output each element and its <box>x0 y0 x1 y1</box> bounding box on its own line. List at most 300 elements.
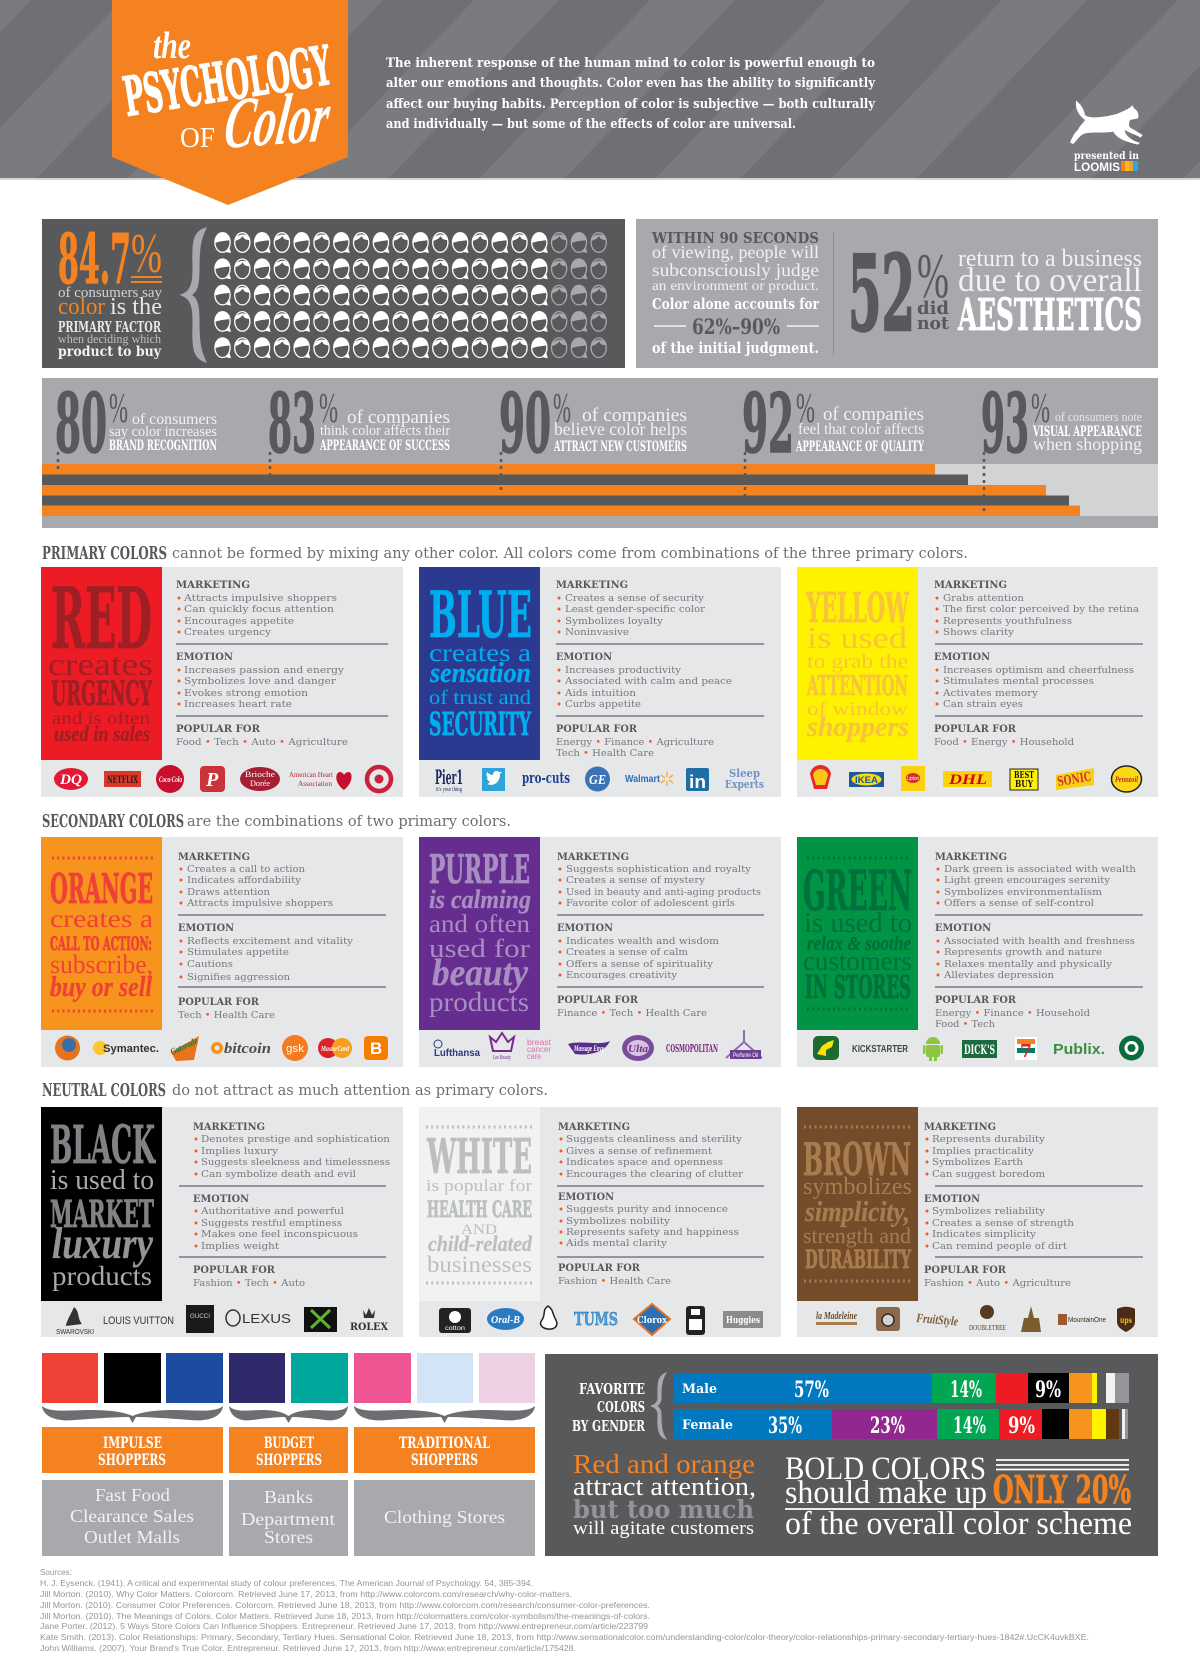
block text: orange: CALL TO ACTION: <box>50 933 152 955</box>
details: red: Creates urgency <box>184 627 272 638</box>
logo: Dick's <box>962 1040 997 1058</box>
block text: yellow: to grab the <box>807 651 908 673</box>
logo: Lufthansa: Lufthansa <box>434 1048 480 1059</box>
stat: 52% did not: did <box>917 298 949 319</box>
sources: Jill Morton. (2010). The Meanings of Colors. Color Matters. Retrieved June 18, 2013, from http://colormatters.com/color-symbolism/the-meanings-of-colors. <box>40 1612 650 1621</box>
logo: Android <box>923 1037 943 1061</box>
title banner: Color <box>220 76 335 164</box>
details: yellow: The first color perceived by the retina <box>943 604 1139 615</box>
details: white: Encourages the clearing of clutter <box>566 1169 743 1180</box>
logo: Brioche Doree: Brioche <box>245 770 276 779</box>
logo: Oral-B <box>487 1308 524 1330</box>
block text: red <box>48 569 153 746</box>
logo: Breast Cancer Care: breast <box>527 1038 552 1047</box>
chart: female bar <box>673 1409 1128 1439</box>
details: yellow: Increases optimism and cheerfulness <box>943 665 1134 676</box>
logo: Blogger: B <box>370 1039 382 1058</box>
shopper card: impulse: Clearance Sales <box>70 1506 194 1526</box>
logo: la Madeleine <box>816 1310 857 1325</box>
shopper card: budget <box>229 1427 348 1556</box>
details: brown: Fashion • Auto • Agriculture <box>924 1278 1071 1289</box>
logo: Walmart: Walmart <box>625 774 661 785</box>
details: black: Makes one feel inconspicuous <box>201 1229 358 1240</box>
details: yellow: Grabs attention <box>943 593 1024 604</box>
stat: 84.7%: % <box>131 223 162 285</box>
logo: Tums: TUMS <box>574 1309 618 1330</box>
logo: Huggies <box>723 1311 763 1328</box>
logos: green brands <box>813 1036 1144 1062</box>
logo: Perfume Oil: Perfume Oil <box>733 1053 758 1059</box>
logos: white brands <box>439 1304 763 1335</box>
text: within 90 seconds: Color alone accounts for <box>652 296 819 313</box>
details: red: EMOTION <box>176 651 233 663</box>
logo: DQ <box>54 768 88 790</box>
details: red: Food • Tech • Auto • Agriculture <box>176 737 348 748</box>
stat: 92% <box>742 377 925 472</box>
logo: Symantec: Symantec. <box>103 1043 159 1055</box>
block text: brown: simplicity, <box>804 1196 910 1228</box>
details: yellow: Can strain eyes <box>943 699 1023 710</box>
logo: Breast Cancer Care: care <box>527 1052 541 1061</box>
stat: 93% <box>981 377 1142 472</box>
shopper card: impulse <box>42 1427 223 1556</box>
logo: Gucci <box>186 1305 214 1333</box>
logo: Pier 1 <box>435 765 463 793</box>
block text: red: creates <box>48 646 153 682</box>
details: purple: Used in beauty and anti-aging products <box>566 887 761 898</box>
details: brown: Can suggest boredom <box>932 1169 1045 1180</box>
block text: purple: products <box>429 987 529 1017</box>
heading: primary colors: PRIMARY COLORS <box>42 543 167 564</box>
sources <box>40 1568 1089 1653</box>
intro paragraph: affect our buying habits. Perception of color is subjective — both culturally <box>386 97 875 112</box>
swatches: shopper palettes <box>42 1353 535 1403</box>
block text: blue: sensation <box>429 658 531 689</box>
chart: female bar: 9% <box>1008 1413 1035 1439</box>
details: green: MARKETING <box>935 851 1007 863</box>
logo: MountainOne: MountainOne <box>1068 1315 1106 1324</box>
moustache braces <box>42 1406 535 1423</box>
stat: 52% did not: % <box>917 240 949 311</box>
block text: yellow: is used <box>807 620 908 655</box>
title banner <box>112 0 348 205</box>
details: black <box>179 1121 390 1289</box>
details: purple: EMOTION <box>557 922 613 934</box>
intro paragraph: The inherent response of the human mind to color is powerful enough to <box>386 56 875 71</box>
details: green: Represents growth and nature <box>944 947 1102 958</box>
logo: Lexus <box>226 1310 291 1326</box>
chart: female bar: 23% <box>870 1413 905 1439</box>
stat: 80% <box>55 377 217 472</box>
brace <box>651 1373 666 1439</box>
logos: red brands <box>54 765 391 793</box>
text: bold colors: of the overall color scheme <box>785 1506 1132 1542</box>
details: green: Energy • Finance • Household <box>935 1008 1090 1019</box>
block text: purple: PURPLE <box>429 847 530 893</box>
heading: neutral colors: NEUTRAL COLORS <box>42 1080 166 1101</box>
text: bold colors: should make up <box>785 1475 987 1511</box>
logos: blue brands: Pier1 <box>435 765 463 789</box>
stat: 92%: APPEARANCE OF QUALITY <box>795 439 925 455</box>
block text: purple: is calming <box>429 885 531 914</box>
logo: Cotton: cotton <box>445 1326 465 1332</box>
details: black: MARKETING <box>193 1121 265 1133</box>
details: white: EMOTION <box>558 1191 614 1203</box>
title banner: PSYCHOLOGY <box>119 33 336 129</box>
logos: purple brands: COSMOPOLITAN <box>666 1042 718 1055</box>
logo: Pro-Cuts: pro-cuts <box>522 769 570 787</box>
details: green: Food • Tech <box>935 1019 995 1030</box>
details: brown: EMOTION <box>924 1193 980 1205</box>
text: consumers primary factor: PRIMARY FACTOR <box>58 318 161 336</box>
logo: DQ: DQ <box>59 772 82 788</box>
details: brown: Indicates simplicity <box>932 1229 1037 1240</box>
chart: male bar: 14% <box>950 1377 982 1403</box>
logo: Lee Beauty <box>490 1033 514 1061</box>
details: black: EMOTION <box>193 1193 249 1205</box>
block text: white: businesses <box>427 1252 532 1277</box>
details: black: Suggests sleekness and timelessness <box>201 1157 390 1168</box>
text: red and orange: but too much <box>573 1495 754 1524</box>
intro paragraph: alter our emotions and thoughts. Color even has the ability to significantly <box>386 76 875 91</box>
logo: Dick's: DICK'S <box>964 1043 995 1058</box>
logo: DoubleTree <box>969 1305 1006 1332</box>
details: purple: Encourages creativity <box>566 970 678 981</box>
block text: yellow <box>805 584 909 743</box>
details: green: Light green encourages serenity <box>944 875 1111 886</box>
logos: brown brands <box>816 1305 1135 1332</box>
logo: Gucci: GUCCI <box>190 1314 210 1320</box>
details: orange: MARKETING <box>178 851 250 863</box>
logo: Swarovski: SWAROVSKI <box>56 1329 94 1336</box>
logo: Xbox <box>304 1307 337 1332</box>
details: black: POPULAR FOR <box>193 1264 275 1276</box>
text: within 90 seconds: 62%–90% <box>692 314 780 339</box>
details: green: Offers a sense of self-control <box>944 898 1094 909</box>
text: red and orange: Red and orange <box>573 1449 755 1479</box>
logo: Pier 1: it's your thing <box>436 787 462 793</box>
icon: wolf and Loomis credit <box>1070 101 1143 174</box>
block text: yellow: YELLOW <box>805 584 909 632</box>
panel: red <box>41 567 403 797</box>
logo: GSK <box>282 1035 308 1061</box>
text: return due to aesthetics: due to overall <box>958 262 1142 299</box>
details: green: POPULAR FOR <box>935 994 1016 1006</box>
panel: black <box>41 1107 403 1337</box>
block text: green: customers <box>803 946 912 976</box>
details: black: Implies luxury <box>201 1146 279 1157</box>
text: within 90 seconds: of viewing, people will <box>652 242 819 262</box>
block text: orange: creates a <box>50 906 153 933</box>
stat: 92%: of companies <box>823 404 924 425</box>
stat: 83%: APPEARANCE OF SUCCESS <box>319 438 450 454</box>
block text: black: luxury <box>52 1219 153 1268</box>
text: red and orange: will agitate customers <box>573 1518 754 1539</box>
block text: orange: subscribe, <box>50 950 153 979</box>
details: purple: MARKETING <box>557 851 629 863</box>
block text: brown: strength and <box>803 1223 911 1248</box>
details: brown: Represents durability <box>932 1134 1046 1145</box>
details: white: Indicates space and openness <box>566 1157 723 1168</box>
details: red: Increases passion and energy <box>184 665 345 676</box>
details: red: Encourages appetite <box>184 616 294 627</box>
text: red and orange <box>573 1449 756 1539</box>
details: purple: Indicates wealth and wisdom <box>566 936 719 947</box>
sources: Jill Morton. (2010). Why Color Matters. Colorcom. Retrieved June 17, 2013, from http://www.colorcom.com/research/why-color-matters. <box>40 1590 572 1599</box>
logo: building <box>1021 1306 1041 1332</box>
logo: Publix: Publix. <box>1053 1041 1105 1058</box>
details: blue: Tech • Health Care <box>556 748 654 759</box>
details: blue: Symbolizes loyalty <box>565 616 664 627</box>
block text: yellow: shoppers <box>806 712 909 743</box>
details: blue: Aids intuition <box>564 688 636 699</box>
details: orange: EMOTION <box>178 922 234 934</box>
text: consumers primary factor: product to buy <box>58 344 162 360</box>
shopper card: impulse: Fast Food <box>95 1485 170 1505</box>
block text: blue: of trust and <box>429 687 531 709</box>
block text: yellow: ATTENTION <box>806 671 908 702</box>
shopper card: budget: SHOPPERS <box>256 1450 322 1469</box>
block text: black <box>50 1115 156 1291</box>
stat: 90%: believe color helps <box>554 419 687 439</box>
heading: secondary colors <box>42 811 511 832</box>
heading: secondary colors: are the combinations of two primary colors. <box>187 812 511 830</box>
logo: Breast Cancer Care <box>527 1038 552 1061</box>
details: black: Denotes prestige and sophistication <box>201 1134 390 1145</box>
stat: 92%: % <box>796 386 815 432</box>
details: white: Aids mental clarity <box>565 1238 668 1249</box>
shopper card: traditional: SHOPPERS <box>411 1450 478 1469</box>
logo: Lufthansa <box>434 1040 480 1059</box>
heading: primary colors: cannot be formed by mixing any other color. All colors come from combinations of the three primary colors. <box>172 544 968 562</box>
details: orange: Tech • Health Care <box>178 1010 275 1021</box>
heading: neutral colors <box>42 1080 548 1101</box>
shopper card: budget: Department <box>241 1509 335 1529</box>
logo: DHL <box>943 771 992 788</box>
shopper card: impulse: IMPULSE <box>103 1433 162 1452</box>
details: red <box>176 579 388 748</box>
logo: Brioche Doree <box>240 767 280 791</box>
details: orange <box>178 851 386 1021</box>
details: brown: Can remind people of dirt <box>932 1241 1067 1252</box>
text: bold colors <box>785 1451 1132 1542</box>
details: yellow: MARKETING <box>934 579 1007 591</box>
logo: Starbucks <box>1119 1036 1144 1060</box>
block text: blue: creates a <box>429 640 531 667</box>
stat: 83%: of companies <box>347 407 450 428</box>
block text: blue <box>429 578 532 743</box>
panel: yellow <box>797 567 1158 797</box>
block text: red: and is often <box>52 708 150 728</box>
logo: Coca-Cola: Coca-Cola <box>159 775 182 784</box>
stat: 80%: BRAND RECOGNITION <box>109 438 217 454</box>
block text: red: used in sales <box>54 721 150 746</box>
block text: green: is used to <box>804 908 912 939</box>
details: brown: Creates a sense of strength <box>932 1218 1074 1229</box>
text: consumers primary factor <box>58 285 162 360</box>
details: black: Can symbolize death and evil <box>201 1169 356 1180</box>
heading: favorite colors by gender: BY GENDER <box>572 1417 645 1435</box>
logo: la Madeleine: la Madeleine <box>816 1310 857 1322</box>
logo: UPS <box>1117 1307 1135 1332</box>
stat: 84.7% <box>58 220 162 300</box>
heading: neutral colors: do not attract as much attention as primary colors. <box>172 1081 548 1099</box>
block text: purple: and often <box>429 911 531 938</box>
logo: Huggies: Huggies <box>726 1316 760 1326</box>
stat: 93%: % <box>1031 386 1050 432</box>
details: green: Relaxes mentally and physically <box>944 959 1113 970</box>
block text: orange: ORANGE <box>50 865 153 913</box>
stat: 52% did not: 52 <box>848 232 915 355</box>
details: orange: Attracts impulsive shoppers <box>186 898 333 909</box>
heading: secondary colors: SECONDARY COLORS <box>42 811 184 832</box>
chart: male bar: Male <box>682 1382 717 1397</box>
block text: brown: symbolizes <box>803 1174 912 1200</box>
logo: Instagram <box>876 1307 900 1331</box>
logo: Pennzoil: Pennzoil <box>1115 775 1139 784</box>
text: within 90 seconds <box>651 229 819 357</box>
stat: 90%: 90 <box>499 377 551 472</box>
stat: 84.7%: 84.7 <box>58 220 131 300</box>
details: red: Symbolizes love and danger <box>184 676 337 687</box>
details: blue: MARKETING <box>556 579 628 591</box>
chart: male bar <box>673 1373 1129 1403</box>
stat: 93%: 93 <box>981 377 1029 472</box>
text: red and orange: attract attention, <box>573 1472 756 1501</box>
details: orange: Indicates affordability <box>187 875 302 886</box>
panel: purple <box>419 837 781 1067</box>
logo: 7-Eleven <box>1015 1037 1037 1062</box>
logo: Pennzoil <box>1112 766 1142 792</box>
details: blue: EMOTION <box>556 651 612 663</box>
text: bold colors: BOLD COLORS <box>785 1451 986 1487</box>
logo: UPS: ups <box>1120 1315 1132 1325</box>
details: red: MARKETING <box>176 579 250 591</box>
intro paragraph: and individually — but some of the effects of color are universal. <box>386 117 796 132</box>
panel: green: GREEN <box>803 858 912 923</box>
chart: male bar: 57% <box>794 1377 829 1403</box>
block text: white: HEALTH CARE <box>427 1197 532 1223</box>
details: blue: Noninvasive <box>565 627 629 638</box>
block text: black: MARKET <box>50 1192 154 1236</box>
details: red: Can quickly focus attention <box>184 604 334 615</box>
block text: brown: DURABILITY <box>805 1245 912 1274</box>
logo: Target <box>367 767 391 791</box>
stat: 52% did not: not <box>917 313 950 334</box>
logo: Blogger <box>364 1036 388 1060</box>
details: purple: Offers a sense of spirituality <box>566 959 714 970</box>
sources: Jill Morton. (2010). Consumer Color Preferences. Colorcom. Retrieved June 18, 2013, from http://www.colorcom.com/research/consumer-color-preferences. <box>40 1601 650 1610</box>
panel: 84.7% of consumers <box>42 219 625 368</box>
logo: Pinterest <box>200 766 225 792</box>
details: blue: Least gender-specific color <box>565 604 705 615</box>
bars <box>42 464 1080 516</box>
logo: Coca-Cola <box>156 765 184 793</box>
text: return due to aesthetics <box>957 246 1142 341</box>
details: blue: POPULAR FOR <box>556 723 637 735</box>
details: purple: Finance • Tech • Health Care <box>557 1008 707 1019</box>
logo: Sleep Experts: Experts <box>725 778 764 791</box>
chart: female bar: 35% <box>768 1413 802 1439</box>
sources: Sources: <box>40 1568 72 1577</box>
logo: Lipton: Lipton <box>907 776 919 782</box>
block text: green <box>803 858 912 1006</box>
stat: 93%: of consumers note <box>1055 409 1142 424</box>
details: green: Dark green is associated with wealth <box>944 864 1136 875</box>
chart: female bar: Female <box>682 1418 733 1433</box>
logo: Sleep Experts <box>725 767 764 791</box>
title banner: the <box>153 25 191 67</box>
details: white: Symbolizes nobility <box>566 1216 671 1227</box>
details: white: Gives a sense of refinement <box>566 1146 712 1157</box>
logo: John Deere <box>813 1036 839 1060</box>
details: white: MARKETING <box>558 1121 630 1133</box>
logo: GE: GE <box>589 773 606 788</box>
logo: Cotton <box>439 1308 471 1333</box>
heading: favorite colors by gender: COLORS <box>597 1398 645 1416</box>
details: green: Symbolizes environmentalism <box>944 887 1102 898</box>
details: yellow <box>934 579 1143 748</box>
logo: LinkedIn <box>686 768 709 792</box>
stat: 83%: % <box>319 386 338 432</box>
details: yellow: POPULAR FOR <box>934 723 1016 735</box>
block text: blue: BLUE <box>429 578 532 653</box>
block text: white: AND <box>461 1222 497 1238</box>
stat: 90% <box>499 377 687 472</box>
logo: Perfume Oil <box>726 1030 762 1059</box>
details: white: Fashion • Health Care <box>558 1276 671 1287</box>
shopper card: budget: Banks <box>264 1487 313 1507</box>
details: purple: Suggests sophistication and royalty <box>566 864 752 875</box>
block text: brown <box>803 1133 912 1274</box>
logos: blue brands <box>435 765 764 793</box>
details: green <box>935 851 1143 1030</box>
details: orange: Cautions <box>187 959 233 970</box>
logo: pear outline <box>541 1306 557 1329</box>
details: orange: Draws attention <box>187 887 270 898</box>
logo: Lee Beauty: Lee Beauty <box>493 1055 511 1061</box>
logo: Twitter <box>482 768 505 791</box>
block text: white: is popular for <box>426 1176 532 1195</box>
logo: Ultra: Ulta <box>628 1043 649 1055</box>
logo: Oral-B: Oral-B <box>491 1314 520 1326</box>
details: purple: Favorite color of adolescent girls <box>566 898 735 909</box>
details: blue: Energy • Finance • Agriculture <box>556 737 714 748</box>
logo: 7-Eleven: 7 <box>1020 1041 1032 1062</box>
details: white: POPULAR FOR <box>558 1262 640 1274</box>
shopper card: traditional: Clothing Stores <box>384 1507 505 1527</box>
details: brown: Symbolizes reliability <box>932 1206 1046 1217</box>
details: red: Increases heart rate <box>184 699 292 710</box>
text: within 90 seconds: of the initial judgment. <box>652 339 819 357</box>
text: consumers primary factor: color <box>58 294 105 320</box>
panel: orange <box>41 837 403 1067</box>
stat: 80%: 80 <box>55 377 107 472</box>
logos: orange brands <box>55 1035 388 1061</box>
stat: 80%: % <box>109 386 128 432</box>
logo: Kickstarter: KICKSTARTER <box>852 1044 909 1055</box>
details: white: Suggests cleanliness and sterility <box>566 1134 743 1145</box>
logo: Clorox <box>634 1304 670 1335</box>
text: consumers primary factor: of consumers say <box>58 285 162 301</box>
block text: white: child-related <box>428 1231 533 1256</box>
title banner: OF <box>180 122 215 154</box>
panel: green <box>797 837 1158 1067</box>
block text: purple: beauty <box>432 952 528 994</box>
panel: red: RED <box>51 569 152 668</box>
details: orange: Stimulates appetite <box>187 947 289 958</box>
logo: American Heart Association: American Heart <box>289 770 334 779</box>
